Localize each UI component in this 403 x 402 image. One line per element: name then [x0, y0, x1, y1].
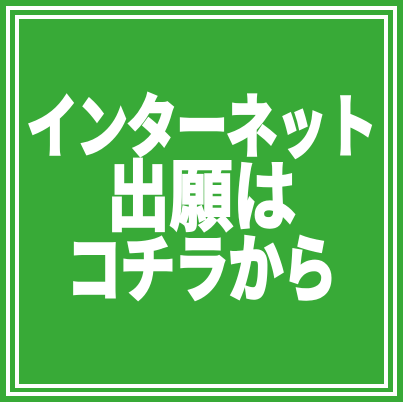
heading line 3: コチラから	[67, 231, 336, 311]
heading line 1: インターネット	[27, 90, 376, 166]
heading line 2: 出願は	[107, 155, 296, 241]
